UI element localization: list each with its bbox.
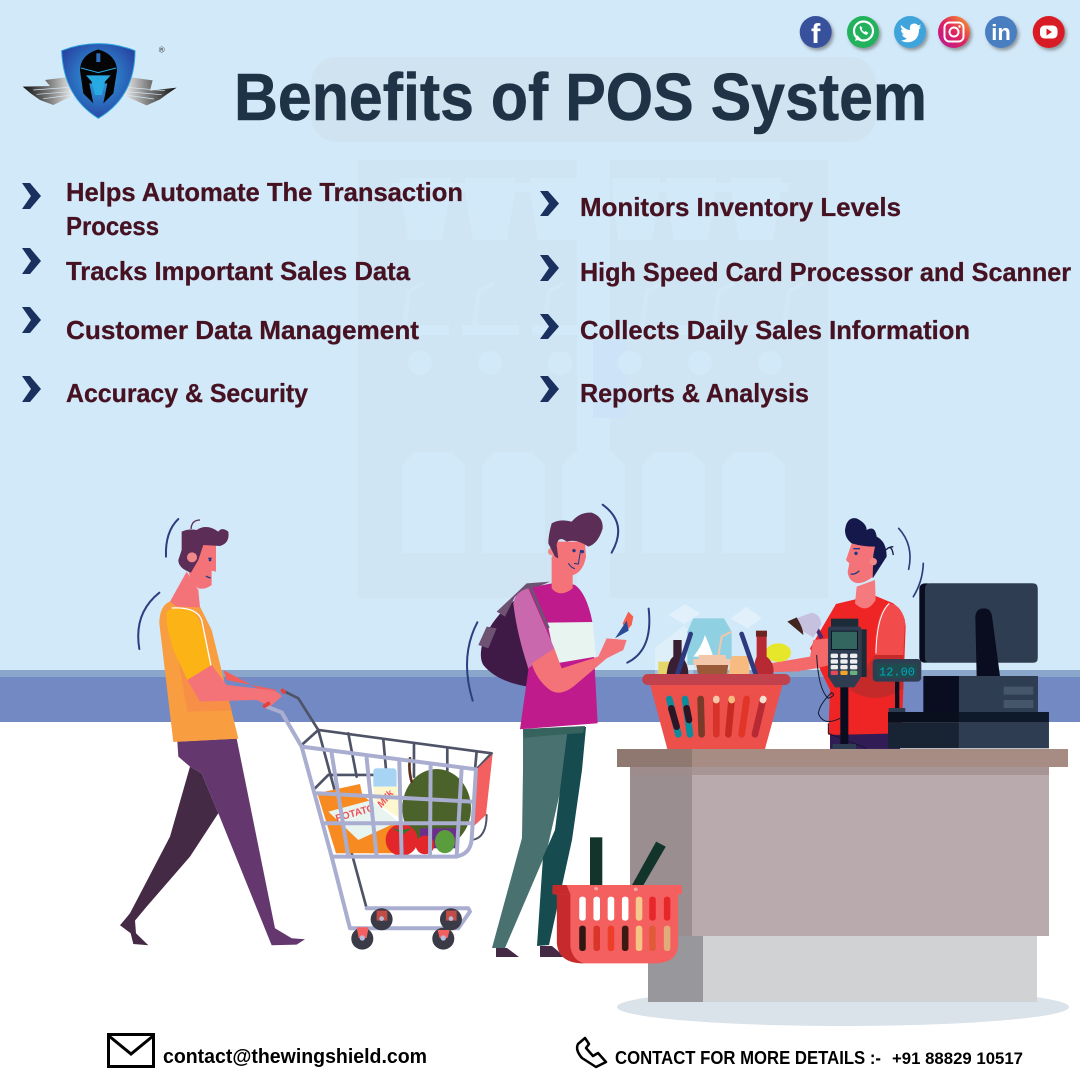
background wall [0,0,1080,670]
counter floor shadow [617,988,1069,1026]
phone number: +91 88829 10517 [892,1049,1023,1068]
icon: chevron [22,307,41,333]
backpack [478,582,550,687]
basket rim [642,674,790,685]
icon: chevron [540,255,559,281]
contact label: CONTACT FOR MORE DETAILS :- [615,1048,881,1068]
hair [178,520,229,573]
cart wheels [351,908,462,950]
large red basket with groceries [642,604,800,749]
counter [617,749,1069,1026]
benefit text continued: Process [66,211,159,241]
paper [547,622,596,663]
benefit text: Accuracy & Security [66,378,309,408]
cash register [888,676,1049,748]
cart side panel [472,754,493,840]
neck and face [170,543,216,607]
face [548,542,586,575]
motion arcs [899,528,923,597]
benefits list: right column [540,191,1071,408]
icon: youtube [1033,16,1065,48]
customer with backpack [467,505,649,957]
basket handles [677,634,756,674]
basket rim [553,885,682,894]
icon: helmet [80,49,117,103]
icon: chevron [540,376,559,402]
groceries [655,604,800,675]
icon: chevron [540,314,559,339]
shopping cart [265,691,493,950]
price display: 12.00 [879,665,915,679]
motion arcs [467,505,649,701]
basket body [557,894,678,963]
icon: facebook [800,16,832,49]
cashier trousers [830,732,900,749]
cart goods [317,758,471,856]
front leg [177,739,305,945]
cart product labels [334,788,397,825]
basket slots with goods [579,897,670,951]
benefits list: left column [22,177,463,408]
cashier arm [770,638,830,672]
shopper with cart [120,519,493,950]
benefit text: Helps Automate The Transaction [66,177,463,207]
icon: chevron [22,183,41,209]
logo: winged shield [23,44,177,118]
register and cashier [770,518,1049,749]
email address: contact@thewingshield.com [163,1046,427,1068]
benefit text: Reports & Analysis [580,378,809,408]
benefit text: Monitors Inventory Levels [580,192,901,222]
hair [548,513,603,558]
benefit text: High Speed Card Processor and Scanner [580,257,1071,287]
icon: right wing [123,77,177,105]
cart product labels: POTATO [334,803,376,825]
cashier shirt [810,595,906,735]
small red basket [553,837,682,963]
icon: envelope [108,1034,154,1066]
icon: phone [577,1038,606,1067]
icon: facebook: f [811,18,821,49]
icon: left wing [23,77,74,105]
benefit text: Collects Daily Sales Information [580,315,970,345]
barcode scanner [787,613,822,638]
benefit text: Customer Data Management [66,315,419,345]
icon: whatsapp [847,16,879,48]
trousers [492,726,586,948]
monitor [919,583,1038,676]
icon: linkedin: in [991,20,1011,45]
title: Benefits of POS System [234,60,927,135]
shoes [496,946,565,957]
footer: phone contact [577,1038,1023,1068]
background floor [0,722,1080,1080]
registered mark: ® [159,45,165,54]
icon: chevron [22,376,41,402]
icon: shield [62,44,135,118]
title backing pill [311,57,876,142]
wall skirting band [0,670,1080,722]
cashier neck [855,580,876,608]
cart handle grips [265,691,284,706]
basket slots with goods [669,699,763,734]
card terminal [828,619,867,749]
arm [187,665,282,707]
benefit text: Tracks Important Sales Data [66,256,411,286]
phone [615,621,629,638]
sleeve [166,608,212,680]
faded shelves with products [358,160,828,598]
counter base [648,936,1037,1002]
icon: chevron [540,191,559,216]
icon: instagram [938,16,970,48]
arm and hand [532,612,633,693]
cart product labels: Milk [376,788,397,810]
scanner cable [817,655,867,748]
sleeve [513,586,554,668]
footer: email contact [108,1034,427,1068]
cashier face [846,543,875,583]
counter body [630,767,1049,936]
price display [873,659,921,713]
basket body [650,684,783,749]
basket handles [590,837,666,894]
motion arcs [138,519,178,649]
cart rear frame [285,692,492,908]
shirt [159,602,238,742]
counter top [617,749,1068,767]
icon: twitter [894,16,926,48]
shirt [513,583,598,729]
cart front frame [267,707,476,928]
icon: linkedin [985,16,1017,48]
icon: chevron [22,248,41,274]
neck [552,557,573,593]
rear leg [120,767,218,945]
cashier hair [845,518,893,578]
social icons row [800,16,1065,49]
